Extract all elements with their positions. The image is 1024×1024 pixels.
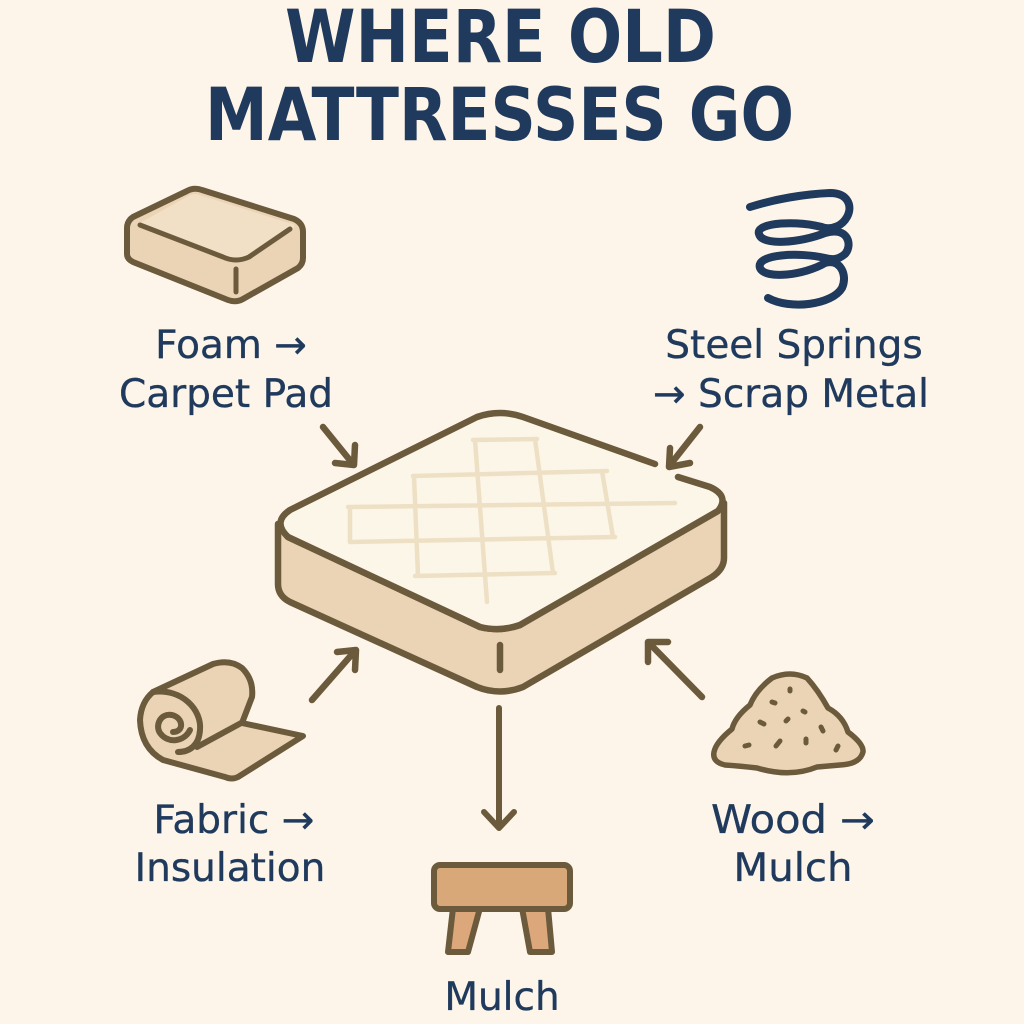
label: wood: Mulch bbox=[734, 846, 852, 891]
arrow: fabric to mattress bbox=[312, 650, 356, 700]
label: steel springs bbox=[653, 323, 929, 417]
icon: steel spring bbox=[750, 193, 849, 305]
label: wood: Wood → bbox=[711, 798, 875, 843]
label: fabric: Insulation bbox=[135, 846, 325, 891]
icon: wood pile bbox=[714, 674, 863, 773]
wood chips bbox=[745, 689, 838, 750]
title: MATTRESSES GO bbox=[205, 73, 794, 158]
arrow: wood to mattress bbox=[648, 642, 702, 697]
label: mulch: Mulch bbox=[444, 975, 560, 1020]
arrow: springs to mattress bbox=[669, 427, 700, 467]
mattress side bbox=[278, 503, 724, 692]
icon: foam block bbox=[127, 189, 303, 301]
arrow: foam to mattress bbox=[323, 427, 355, 465]
mattress bbox=[278, 413, 724, 692]
label: fabric bbox=[135, 798, 325, 891]
label: steel springs: Steel Springs bbox=[665, 323, 923, 368]
mattress seam tick bbox=[497, 645, 503, 670]
label: fabric: Fabric → bbox=[154, 798, 314, 843]
label: foam: Carpet Pad bbox=[119, 372, 333, 417]
label: wood bbox=[711, 798, 875, 891]
label: steel springs: → Scrap Metal bbox=[653, 372, 929, 417]
title bbox=[205, 0, 794, 158]
label: foam: Foam → bbox=[155, 323, 307, 368]
label: foam bbox=[119, 323, 333, 417]
quilting bbox=[348, 439, 675, 602]
arrow: mattress to stool bbox=[484, 708, 514, 828]
icon: stool bbox=[434, 865, 570, 952]
mattress top bbox=[280, 413, 722, 629]
icon: fabric roll bbox=[140, 662, 303, 778]
